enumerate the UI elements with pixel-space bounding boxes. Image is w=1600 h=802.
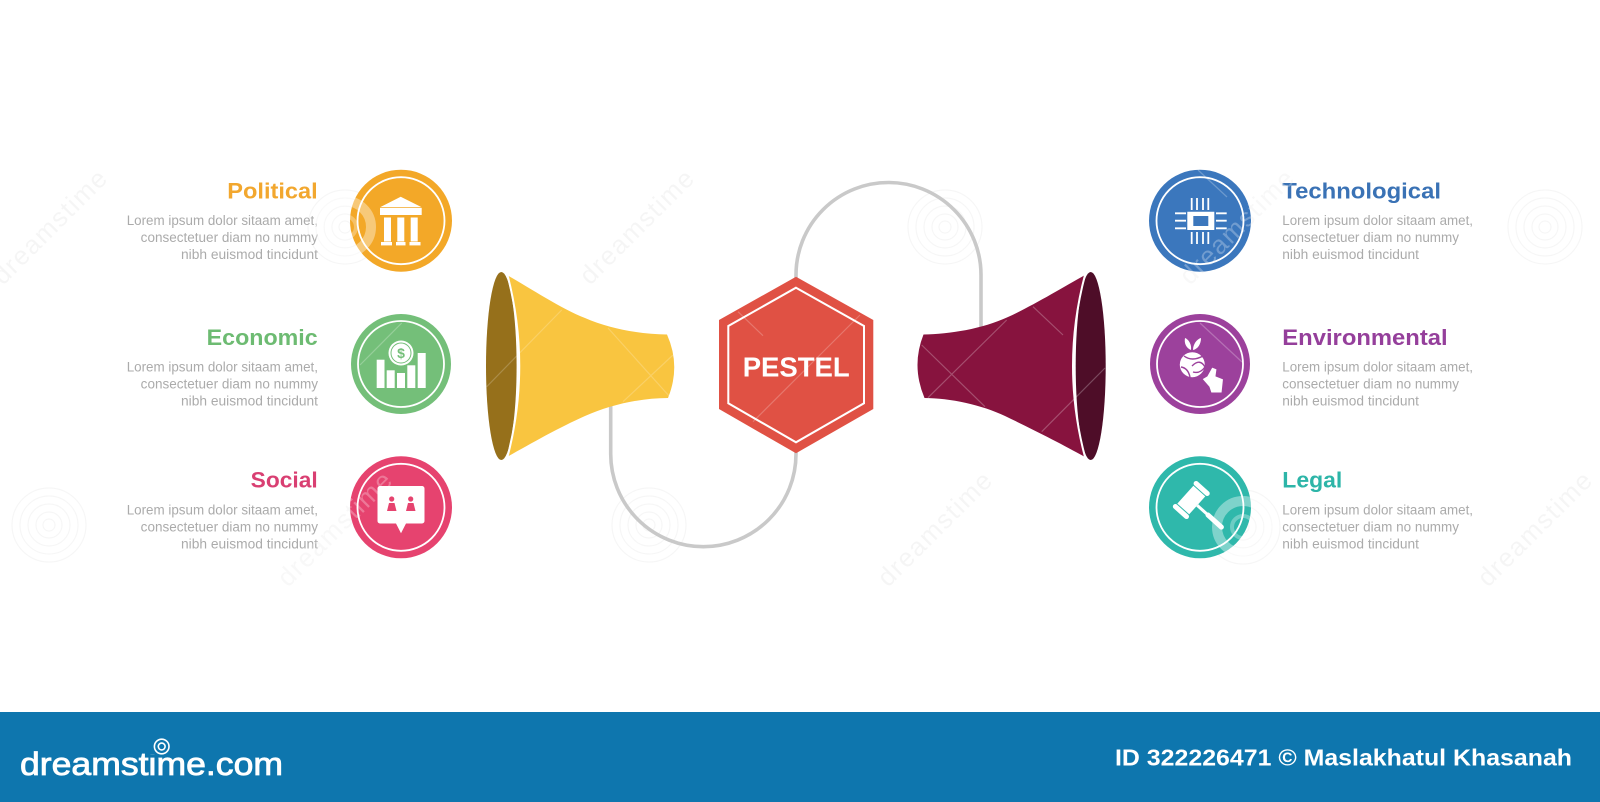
panel: Political	[127, 170, 452, 272]
heading: Social: Social	[251, 468, 318, 493]
text block: Economic: nibh euismod tincidunt	[181, 393, 318, 408]
text block: Political	[127, 213, 318, 262]
text block: Political: Lorem ipsum dolor sitaam amet,	[127, 213, 318, 228]
text block: Environmental: consectetuer diam no nummy	[1282, 376, 1459, 391]
panel: Social	[127, 456, 452, 558]
text block: Legal: Lorem ipsum dolor sitaam amet,	[1282, 502, 1473, 517]
connector: lower curve	[611, 400, 796, 547]
watermark: white overlay on coloured shapes: dreamstime	[271, 464, 399, 592]
text block: Social: nibh euismod tincidunt	[181, 536, 318, 551]
watermark: grey spirals and text: dreamstime	[1471, 464, 1599, 592]
text block: Technological	[1282, 213, 1473, 262]
heading: Environmental: Environmental	[1282, 325, 1448, 350]
text block: Technological: consectetuer diam no nummy	[1282, 230, 1459, 245]
watermark: grey spirals and text	[0, 162, 1599, 592]
text block: Economic	[127, 359, 318, 408]
connector: upper curve	[796, 183, 981, 330]
text block: Legal: nibh euismod tincidunt	[1282, 536, 1419, 551]
text block: Technological: Lorem ipsum dolor sitaam amet,	[1282, 213, 1473, 228]
watermark: grey spirals and text: dreamstime	[271, 464, 399, 592]
panel: Economic	[127, 314, 451, 414]
text block: Social: consectetuer diam no nummy	[141, 519, 318, 534]
watermark: grey spirals and text: dreamstime	[573, 162, 701, 290]
text block: Environmental: Lorem ipsum dolor sitaam amet,	[1282, 359, 1473, 374]
text block: Economic: Lorem ipsum dolor sitaam amet,	[127, 359, 318, 374]
icon: bar chart with coin	[351, 314, 451, 414]
text block: Political: consectetuer diam no nummy	[141, 230, 318, 245]
icon: globe with sprout and hand	[1150, 314, 1250, 414]
logo: dreamstime.com: dreamstime.com	[20, 746, 283, 782]
panel: Legal	[1149, 456, 1473, 558]
watermark: white overlay on coloured shapes: dreamstime	[1173, 162, 1301, 290]
text block: Legal: consectetuer diam no nummy	[1282, 519, 1459, 534]
panel: Environmental	[1150, 314, 1473, 414]
text block: Economic: consectetuer diam no nummy	[141, 376, 318, 391]
text block: Social: Lorem ipsum dolor sitaam amet,	[127, 502, 318, 517]
heading: Legal: Legal	[1282, 468, 1342, 493]
heading: Technological: Technological	[1282, 179, 1441, 204]
text block: Social	[127, 502, 318, 551]
megaphone: maroon right	[917, 272, 1106, 460]
watermark: grey spirals and text: dreamstime	[1173, 162, 1301, 290]
hexagon: PESTEL	[719, 277, 873, 453]
text block: Technological: nibh euismod tincidunt	[1282, 247, 1419, 262]
credit line: ID 322226471 © Maslakhatul Khasanah	[1115, 745, 1572, 771]
heading: Political: Political	[227, 179, 318, 204]
icon: speech bubble with people	[350, 456, 452, 558]
megaphone: yellow left	[486, 272, 674, 460]
icon: gavel	[1149, 456, 1251, 558]
icon: bar chart with coin: $	[397, 345, 405, 361]
text block: Political: nibh euismod tincidunt	[181, 247, 318, 262]
heading: Economic: Economic	[207, 325, 318, 350]
text block: Environmental	[1282, 359, 1473, 408]
text block: Legal	[1282, 502, 1473, 551]
watermark: grey spirals and text: dreamstime	[871, 464, 999, 592]
text block: Environmental: nibh euismod tincidunt	[1282, 393, 1419, 408]
icon: microchip	[1149, 170, 1251, 272]
hexagon label: PESTEL	[743, 352, 850, 383]
footer banner	[0, 712, 1600, 802]
panel: Technological	[1149, 170, 1473, 272]
watermark: white overlay on coloured shapes	[271, 162, 1301, 592]
icon: government building	[350, 170, 452, 272]
